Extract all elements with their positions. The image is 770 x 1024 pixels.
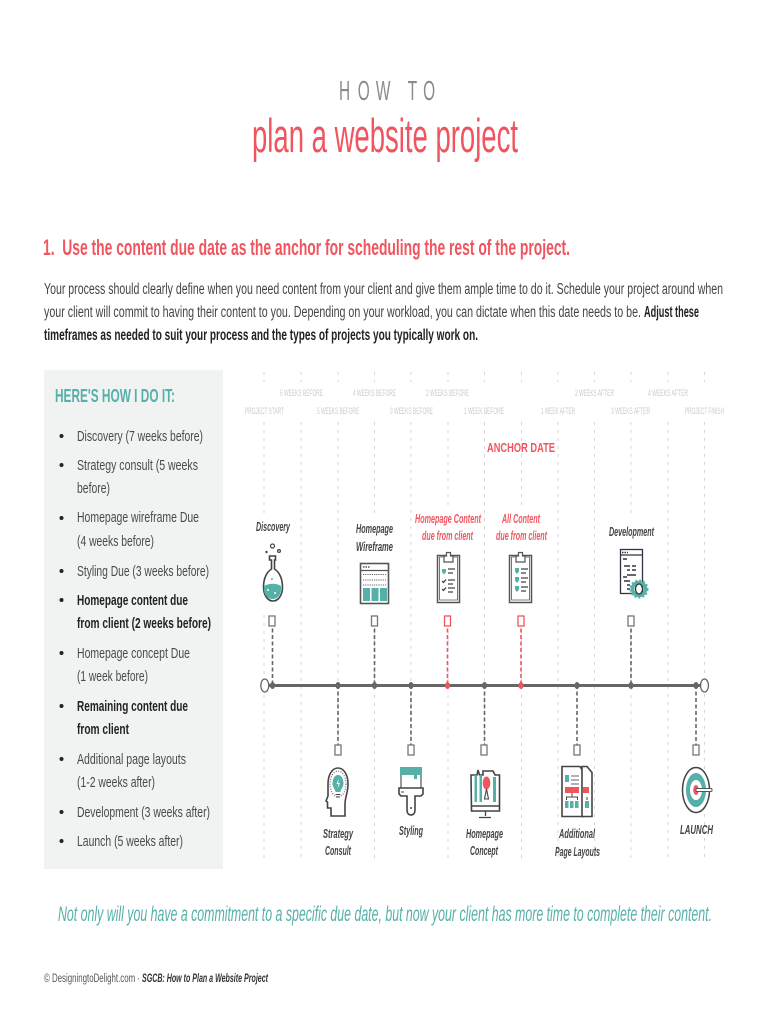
top milestone labels: Homepage Content bbox=[415, 512, 481, 526]
top milestone labels: Wireframe bbox=[356, 540, 393, 554]
title: plan a website project bbox=[252, 109, 518, 162]
top milestone labels bbox=[256, 512, 654, 554]
panel heading: HERE'S HOW I DO IT: bbox=[55, 386, 175, 406]
week labels: 4 WEEKS BEFORE bbox=[353, 388, 396, 398]
week labels: 3 WEEKS BEFORE bbox=[390, 406, 433, 416]
top milestone labels: Homepage bbox=[356, 522, 393, 536]
icon: target bbox=[682, 768, 712, 812]
intro paragraph bbox=[44, 281, 723, 344]
icon: clipboard homepage content bbox=[438, 552, 460, 602]
week grid lines bbox=[264, 372, 704, 862]
week labels: 2 WEEKS AFTER bbox=[575, 388, 614, 398]
step list: from client bbox=[77, 721, 129, 738]
top milestone labels: due from client bbox=[496, 529, 547, 543]
step list: Styling Due (3 weeks before) bbox=[77, 563, 209, 580]
panel: here's how I do it bbox=[44, 370, 223, 869]
week labels: 1 WEEK AFTER bbox=[541, 406, 575, 416]
week labels: PROJECT START bbox=[245, 406, 284, 416]
week labels: 5 WEEKS BEFORE bbox=[317, 406, 359, 416]
top milestone labels: All Content bbox=[501, 512, 540, 526]
top milestone labels: Discovery bbox=[256, 520, 291, 534]
icon: clipboard all content bbox=[510, 552, 532, 602]
top milestone labels: due from client bbox=[422, 529, 473, 543]
anchor date label: ANCHOR DATE bbox=[487, 440, 555, 455]
step list: Remaining content due bbox=[77, 698, 188, 715]
step list: Homepage wireframe Due bbox=[77, 509, 199, 526]
icon: homepage concept bbox=[471, 770, 500, 818]
step list: Strategy consult (5 weeks bbox=[77, 457, 198, 474]
footer credit: © DesigningtoDelight.com · bbox=[44, 973, 140, 985]
step list: (4 weeks before) bbox=[77, 533, 154, 550]
top milestone labels: Development bbox=[609, 525, 654, 539]
icon: paint brush bbox=[399, 767, 423, 815]
icon: flask bbox=[264, 544, 282, 601]
bottom milestone labels: Strategy bbox=[323, 827, 354, 841]
icon: development bbox=[620, 550, 648, 598]
footer credit bbox=[44, 973, 269, 985]
intro paragraph: Adjust these bbox=[644, 304, 699, 321]
week labels: PROJECT FINISH bbox=[685, 406, 724, 416]
step list: Additional page layouts bbox=[77, 751, 186, 768]
step list bbox=[60, 428, 211, 850]
bottom milestone labels: Additional bbox=[558, 827, 595, 841]
bottom milestone labels: Styling bbox=[399, 824, 423, 838]
step list: Homepage content due bbox=[77, 592, 188, 609]
step list: from client (2 weeks before) bbox=[77, 615, 211, 632]
timeline bbox=[261, 616, 708, 755]
week labels: 3 WEEKS AFTER bbox=[611, 406, 650, 416]
step list: Launch (5 weeks after) bbox=[77, 833, 183, 850]
bottom milestone labels: Homepage bbox=[466, 827, 503, 841]
icon: strategy head bbox=[326, 768, 348, 816]
step list: (1-2 weeks after) bbox=[77, 774, 155, 791]
week labels: 2 WEEKS BEFORE bbox=[426, 388, 469, 398]
intro paragraph: timeframes as needed to suit your process and the types of projects you typically work on. bbox=[44, 327, 478, 344]
bottom milestone labels: Concept bbox=[470, 844, 498, 858]
step list: before) bbox=[77, 480, 110, 497]
step list: Homepage concept Due bbox=[77, 645, 190, 662]
icon: wireframe bbox=[360, 564, 388, 604]
icon: page layouts bbox=[562, 766, 592, 816]
week labels: 6 WEEKS BEFORE bbox=[280, 388, 323, 398]
step list: (1 week before) bbox=[77, 668, 148, 685]
week labels: 4 WEEKS AFTER bbox=[648, 388, 688, 398]
bottom milestone labels: LAUNCH bbox=[680, 823, 714, 837]
bottom milestone labels: Page Layouts bbox=[555, 845, 600, 859]
week labels: 1 WEEK BEFORE bbox=[464, 406, 504, 416]
bottom milestone labels bbox=[323, 823, 714, 859]
how to eyebrow: HOWTO bbox=[339, 75, 435, 106]
footer credit: SGCB: How to Plan a Website Project bbox=[142, 973, 269, 985]
bottom milestone labels: Consult bbox=[325, 844, 351, 858]
step list: Development (3 weeks after) bbox=[77, 804, 210, 821]
week labels bbox=[245, 388, 724, 416]
step list: Discovery (7 weeks before) bbox=[77, 428, 203, 445]
